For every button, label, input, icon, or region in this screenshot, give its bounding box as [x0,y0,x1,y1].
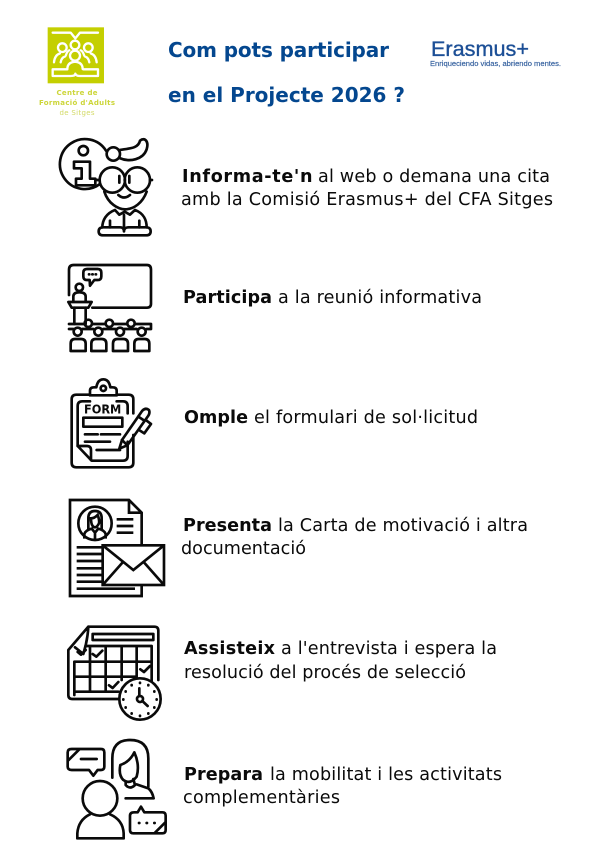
logo: Centre de Formació d'Adults [39,27,115,117]
step 2 [68,265,482,351]
step 5 text line 1 [184,639,497,659]
step 5 text line 2: resolució del procés de selecció [184,663,466,683]
FORM label: FORM [84,402,121,417]
step 3 text: el formulari de sol·licitud [254,408,478,428]
step 1 text line 1: al web o demana una cita [318,167,550,187]
logo text line 2: Formació d'Adults [39,99,115,107]
title [168,38,405,107]
step 6 text line 1: la mobilitat i les activitats [270,765,502,785]
step 4 text line 2: documentació [181,539,306,559]
step 3 [72,379,478,467]
logo text line 1: Centre de [56,89,98,97]
step 1 text line 2: amb la Comisió Erasmus+ del CFA Sitges [181,190,553,210]
icon: two people talking [68,740,166,838]
step 6 text line 1: Prepara [184,765,263,785]
icon: presentation [68,265,151,351]
step 1 text line 1 [182,167,550,187]
title line 1: Com pots participar [168,38,389,62]
step 5 text line 1: Assisteix [184,639,276,659]
step 4 text line 1: Presenta [183,516,272,536]
step 6 text line 2: complementàries [183,788,340,808]
logo: Erasmus+ [430,37,561,68]
Erasmus+ wordmark: Erasmus+ [431,37,529,61]
icon: form on clipboard [72,379,151,467]
step 5 text line 1: a l'entrevista i espera la [281,639,497,659]
logo text line 3: de Sitges [60,109,95,117]
step 4 text line 1: la Carta de motivació i altra [278,516,528,536]
step 6 [68,740,502,838]
step 3 text: Omple [184,408,248,428]
step 5 [68,627,497,720]
Erasmus+ tagline: Enriqueciendo vidas, abriendo mentes. [430,59,561,68]
step 1 text line 1: Informa-te'n [182,167,312,187]
icon: calendar and clock [68,627,161,720]
title line 2: en el Projecte 2026 ? [168,83,405,107]
step 2 text: a la reunió informativa [278,288,482,308]
step 2 text [183,288,482,308]
logo mark [48,27,104,83]
step 2 text: Participa [183,288,272,308]
step 4 [70,500,528,596]
step 1 [60,139,553,235]
icon: information person [60,139,152,235]
icon: document and envelope [70,500,164,596]
